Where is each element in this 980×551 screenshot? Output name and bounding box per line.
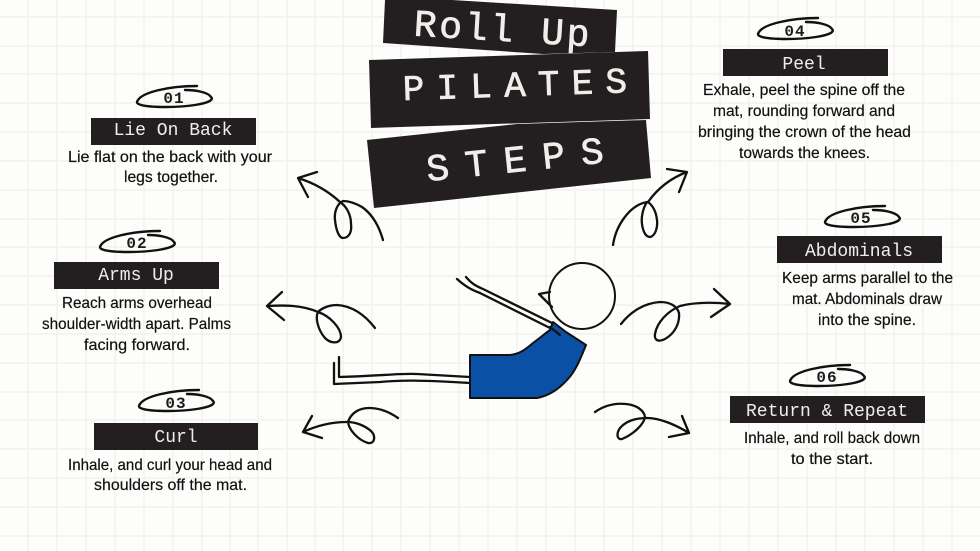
number badge 05: 05	[850, 210, 872, 228]
figure: nose	[539, 292, 552, 307]
description 04: towards the knees.	[739, 145, 870, 162]
arrow to step 05	[621, 289, 730, 341]
description 03: Inhale, and curl your head and	[68, 457, 272, 474]
heading bar: Arms Up: Arms Up	[98, 266, 174, 286]
step 01	[68, 86, 273, 186]
title strip: Pilates: PILATES	[402, 62, 640, 111]
heading bar: Lie On Back: Lie On Back	[114, 121, 232, 141]
arrow to step 03	[303, 408, 398, 443]
heading bar: Return & Repeat	[730, 396, 925, 423]
description 01: legs together.	[124, 169, 218, 186]
figure: arms	[457, 277, 552, 328]
title strip: Roll Up: Roll Up	[412, 5, 593, 58]
number badge 05	[825, 206, 900, 228]
description 05: Keep arms parallel to the	[782, 270, 953, 287]
heading bar: Curl	[94, 423, 258, 450]
description 05: into the spine.	[818, 312, 916, 329]
number badge 03: 03	[165, 395, 187, 413]
description 02: Reach arms overhead	[62, 295, 212, 312]
heading bar: Abdominals: Abdominals	[805, 242, 913, 262]
description 03: shoulders off the mat.	[94, 477, 247, 494]
description 04: Exhale, peel the spine off the	[703, 82, 905, 99]
number badge 02	[100, 231, 175, 253]
heading bar: Lie On Back	[91, 118, 256, 145]
description 04: bringing the crown of the head	[698, 124, 911, 141]
number badge 04	[758, 18, 833, 41]
title strip: Steps	[367, 120, 651, 208]
figure: legs	[334, 357, 470, 384]
description 05: mat. Abdominals draw	[792, 291, 942, 308]
title	[367, 0, 651, 208]
figure: stick person in roll up	[334, 263, 615, 398]
arrow to step 01	[298, 172, 383, 240]
description 02: facing forward.	[84, 337, 190, 354]
step 05	[777, 206, 953, 329]
description 01: Lie flat on the back with your	[68, 149, 273, 166]
step 04	[698, 18, 911, 162]
heading bar: Abdominals	[777, 236, 942, 263]
description 04: mat, rounding forward and	[713, 103, 895, 120]
step 06	[730, 365, 925, 468]
description 02: shoulder-width apart. Palms	[42, 316, 231, 333]
step 03	[68, 390, 272, 494]
number badge 02: 02	[126, 235, 148, 253]
number badge 01: 01	[163, 90, 185, 108]
number badge 06	[790, 365, 865, 387]
heading bar: Peel: Peel	[782, 55, 826, 75]
heading bar: Curl: Curl	[154, 428, 198, 448]
arrow to step 02	[267, 292, 375, 342]
figure: blue torso	[470, 322, 586, 398]
title strip: Steps: STEPS	[424, 130, 622, 193]
step 02	[42, 231, 231, 354]
figure: arm over torso	[550, 327, 560, 335]
heading bar: Return & Repeat: Return & Repeat	[746, 402, 908, 422]
arrow to step 06	[595, 404, 689, 439]
number badge 01	[137, 86, 212, 108]
arrow to step 04	[613, 169, 687, 245]
heading bar: Arms Up	[54, 262, 219, 289]
figure: head	[549, 263, 615, 329]
description 06: to the start.	[791, 451, 873, 468]
title strip: Pilates	[369, 51, 650, 128]
heading bar: Peel	[723, 49, 888, 76]
number badge 03	[139, 390, 214, 413]
number badge 06: 06	[816, 369, 838, 387]
description 06: Inhale, and roll back down	[744, 430, 920, 447]
number badge 04: 04	[784, 23, 806, 41]
